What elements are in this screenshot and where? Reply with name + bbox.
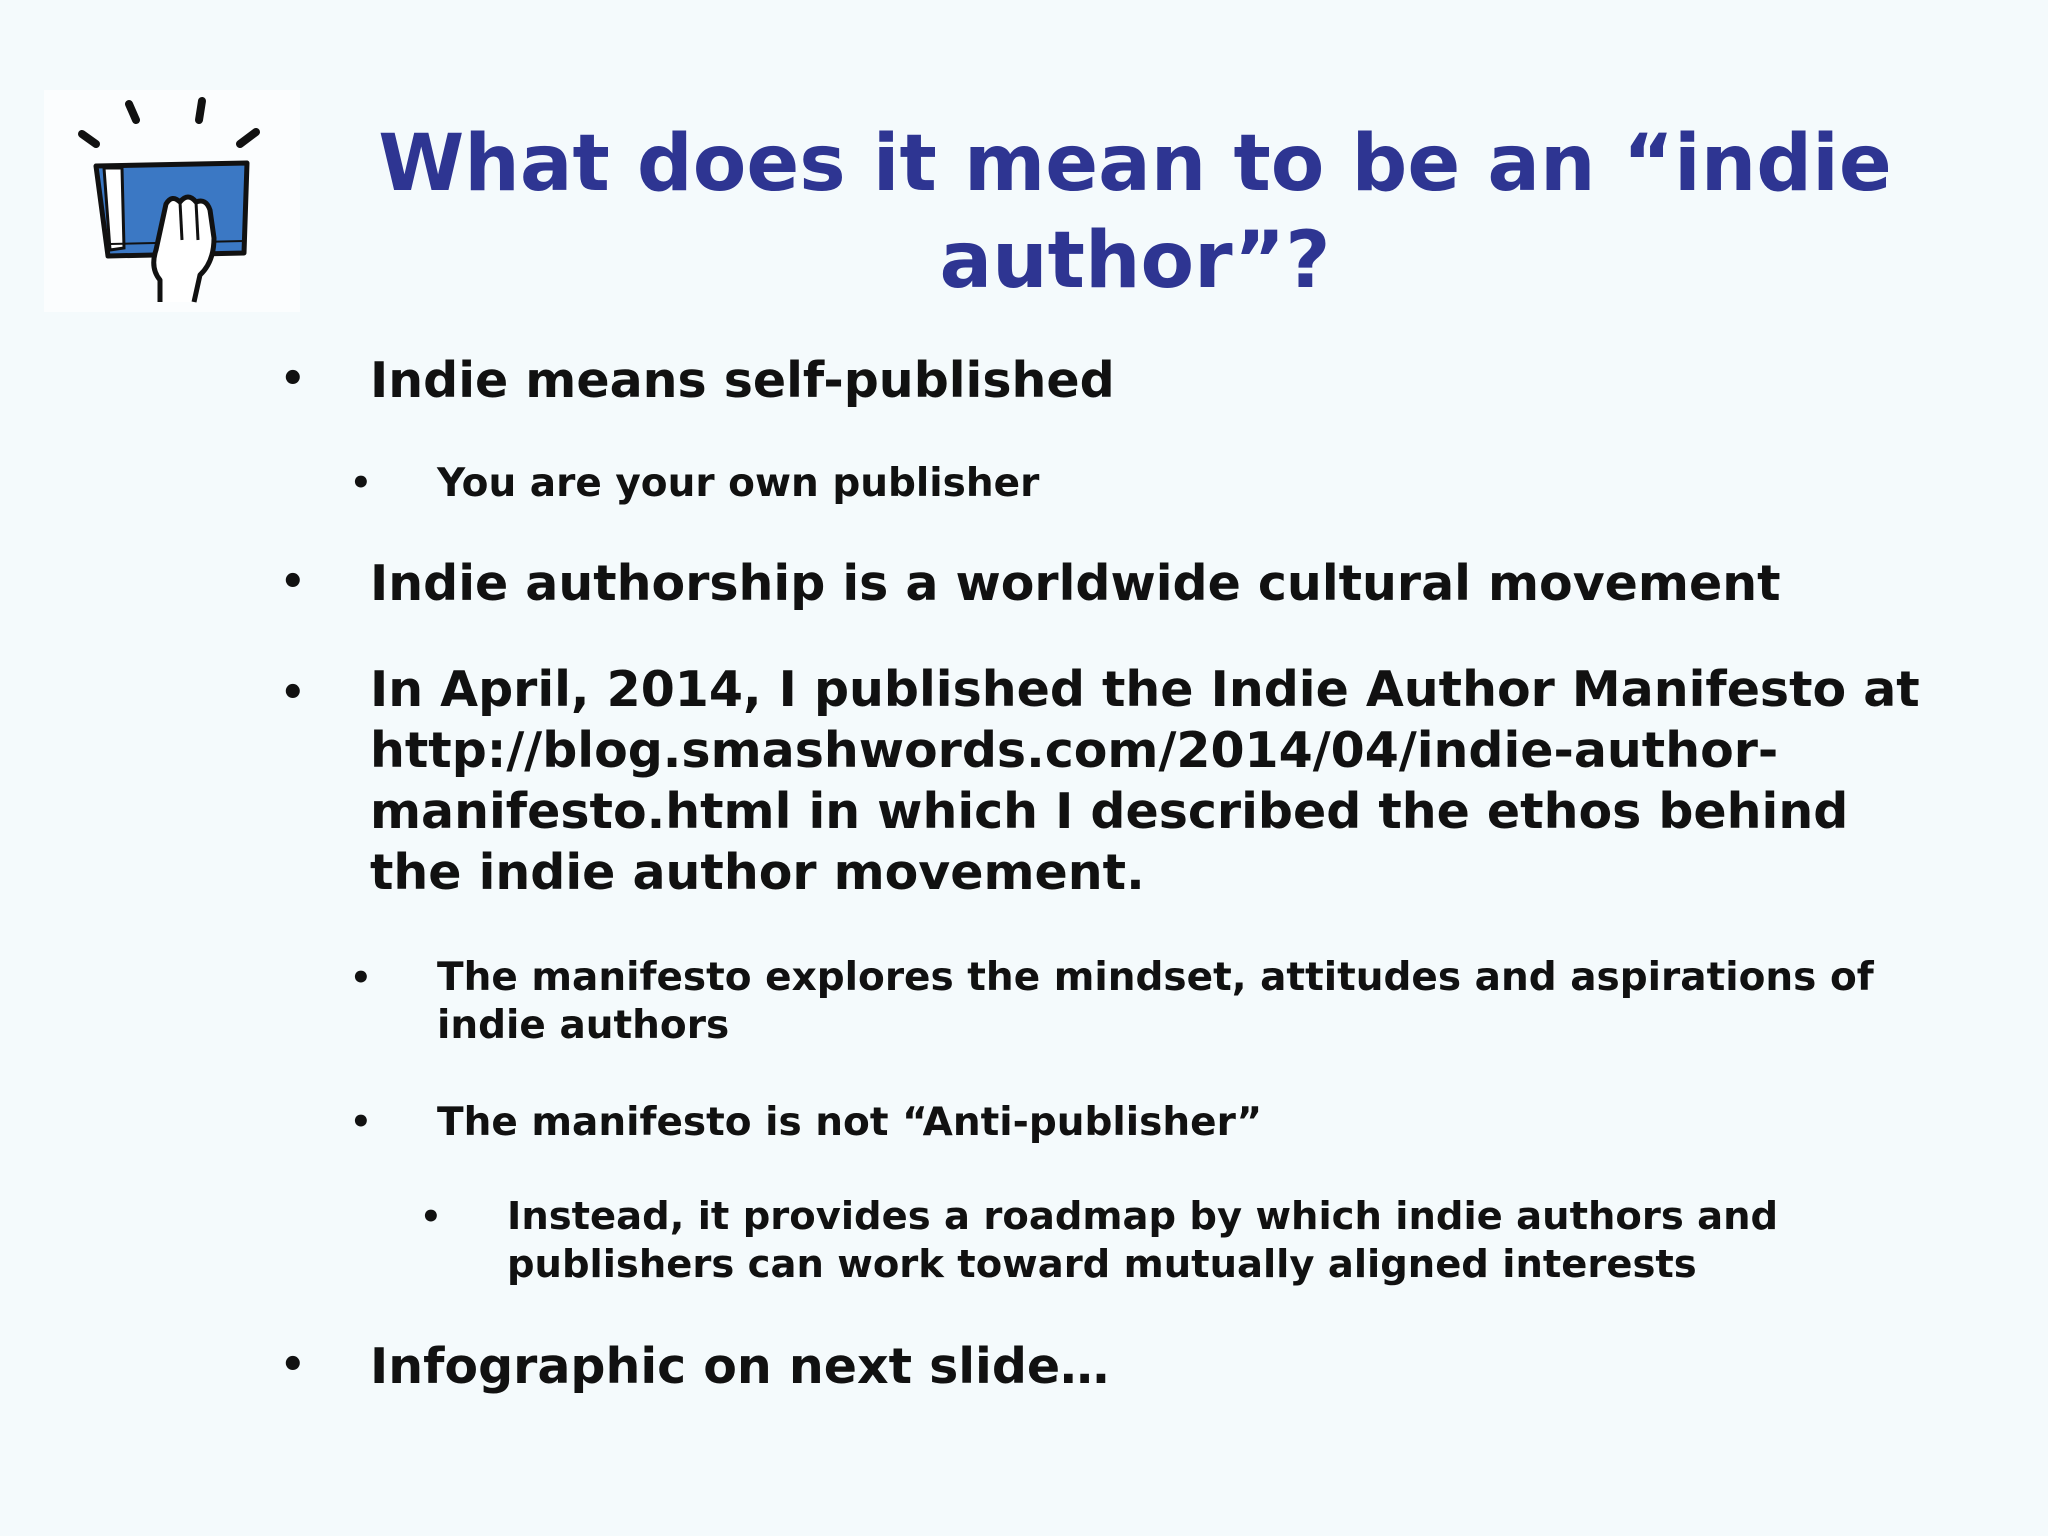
bullet list: http://blog.smashwords.com/2014/04/indie-author- bbox=[370, 722, 1778, 779]
bullet: infographic next bbox=[280, 1338, 1109, 1395]
bullet: indie means self-published bbox=[280, 352, 1115, 409]
sub-bullet: not anti-publisher bbox=[350, 1100, 1262, 1145]
bullet list: • bbox=[280, 559, 306, 605]
icon: hand on book bbox=[78, 97, 260, 302]
title: What does it mean to be an “indie bbox=[378, 119, 1892, 209]
bullet list: You are your own publisher bbox=[437, 461, 1039, 506]
bullet list: Indie authorship is a worldwide cultural movement bbox=[370, 555, 1780, 612]
sub-bullet: own publisher bbox=[350, 461, 1040, 506]
bullet list: Indie means self-published bbox=[370, 352, 1115, 409]
bullet list: • bbox=[350, 1102, 372, 1142]
bullet list: • bbox=[280, 670, 306, 716]
sub-sub-bullet: roadmap bbox=[420, 1194, 1778, 1287]
bullet list: In April, 2014, I published the Indie Author Manifesto at bbox=[370, 661, 1920, 718]
bullet list: Instead, it provides a roadmap by which indie authors and bbox=[507, 1194, 1778, 1239]
sub-bullet: mindset bbox=[350, 955, 1874, 1048]
bullet list: • bbox=[420, 1197, 442, 1237]
bullet list: manifesto.html in which I described the ethos behind bbox=[370, 783, 1848, 840]
title bbox=[378, 119, 1892, 306]
bullet list: The manifesto is not “Anti-publisher” bbox=[437, 1100, 1262, 1145]
bullet: worldwide movement bbox=[280, 555, 1780, 612]
bullet list: • bbox=[350, 463, 372, 503]
bullet list: • bbox=[280, 356, 306, 402]
bullet list: • bbox=[350, 958, 372, 998]
title: author”? bbox=[940, 216, 1330, 306]
bullet list: The manifesto explores the mindset, attitudes and aspirations of bbox=[437, 955, 1874, 1000]
bullet list: indie authors bbox=[437, 1003, 729, 1048]
bullet list: publishers can work toward mutually aligned interests bbox=[507, 1242, 1697, 1287]
bullet: manifesto bbox=[280, 661, 1920, 901]
bullet list: the indie author movement. bbox=[370, 844, 1145, 901]
bullet list: Infographic on next slide… bbox=[370, 1338, 1109, 1395]
bullet list: • bbox=[280, 1342, 306, 1388]
